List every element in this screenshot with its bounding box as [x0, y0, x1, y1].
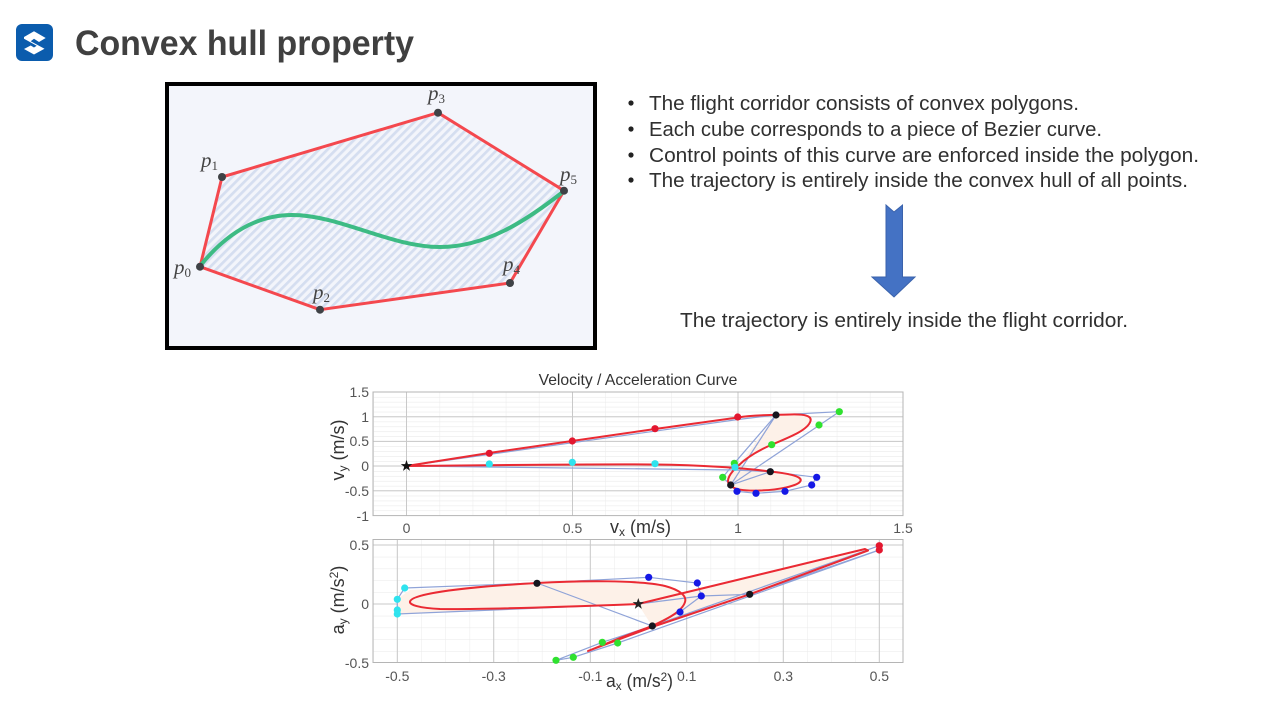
x axis label: vx: x: [619, 525, 625, 539]
x axis label: ax: (m/s: [622, 671, 661, 691]
conclusion text: The trajectory is entirely inside the flight corridor.: [680, 310, 1128, 332]
x axis label: vx: v: [610, 517, 619, 537]
y axis label: ay: (m/s: [328, 578, 348, 618]
bullet list: Each cube corresponds to a piece of Bezier curve.: [649, 119, 1102, 141]
hatched hull and red outline: [200, 113, 564, 310]
acceleration y ticks: -0.5: [345, 655, 369, 671]
point labels: p: [174, 255, 184, 279]
x axis label: ax: a: [606, 671, 616, 691]
velocity x ticks: 1: [734, 520, 742, 536]
point labels: 5: [570, 172, 577, 187]
icon: logo: [16, 24, 53, 61]
x axis label: ax: ): [667, 671, 673, 691]
acceleration plot grid: [373, 540, 903, 662]
x axis label: vx: (m/s): [625, 517, 671, 537]
acceleration x ticks: 0.1: [677, 668, 697, 684]
y axis label: vy: v: [328, 471, 348, 480]
y axis label: vy: (m/s): [328, 420, 348, 465]
title: Convex hull property: [75, 24, 415, 63]
bullet list: The flight corridor consists of convex polygons.: [649, 93, 1079, 115]
acceleration x ticks: [385, 668, 889, 684]
acceleration red curve: [410, 549, 868, 651]
point labels: p: [428, 81, 438, 105]
velocity y ticks: [345, 384, 369, 524]
velocity x ticks: 1.5: [893, 520, 913, 536]
acceleration x ticks: 0.5: [870, 668, 889, 684]
y axis label: ay: a: [328, 624, 348, 634]
velocity control polygons: [406, 412, 839, 493]
velocity y ticks: -1: [357, 508, 369, 524]
point labels: p: [201, 148, 212, 172]
acceleration start star: [633, 598, 644, 609]
control points: [196, 109, 568, 314]
point labels: 1: [212, 158, 218, 173]
y axis label: ay: y: [336, 618, 350, 624]
acceleration y ticks: 0.5: [350, 537, 369, 553]
acceleration x ticks: -0.5: [385, 668, 410, 684]
x axis label: ax: x: [616, 679, 622, 693]
acceleration x ticks: -0.1: [578, 668, 603, 684]
point labels: p: [313, 280, 324, 304]
point labels: 0: [184, 265, 191, 280]
acceleration control polygons: [397, 546, 879, 660]
bullet list: Control points of this curve are enforced inside the polygon.: [649, 145, 1199, 167]
arrow: down: [872, 205, 915, 297]
y axis label: vy: y: [336, 465, 350, 471]
point labels: 3: [438, 91, 445, 106]
x axis label: ax: 2: [661, 670, 667, 684]
acceleration hull fill: [397, 550, 868, 626]
chart title: Velocity / Acceleration Curve: [539, 372, 738, 389]
point labels: 4: [514, 262, 520, 277]
chart: acceleration curve: [327, 537, 903, 693]
acceleration x ticks: 0.3: [774, 668, 793, 684]
velocity plot grid: [373, 392, 903, 516]
velocity y ticks: 0.5: [350, 433, 369, 449]
bullet list: [628, 93, 1199, 192]
y axis label: ay: ): [328, 566, 348, 572]
velocity y ticks: -0.5: [345, 483, 369, 499]
point labels: [172, 81, 577, 305]
velocity x ticks: 0: [403, 520, 411, 536]
green Bezier curve: [200, 191, 564, 266]
velocity y ticks: 0: [361, 458, 369, 474]
point labels: p: [503, 252, 514, 276]
velocity start star: [401, 460, 412, 471]
chart: velocity curve: [328, 372, 913, 539]
y axis label: ay: 2: [327, 571, 341, 578]
velocity x ticks: [403, 520, 913, 536]
acceleration y ticks: 0: [361, 596, 369, 612]
acceleration control points: [394, 542, 883, 664]
acceleration x ticks: -0.3: [482, 668, 506, 684]
velocity y ticks: 1.5: [350, 384, 369, 400]
velocity hull fill: [728, 415, 811, 491]
point labels: p: [560, 162, 570, 186]
bullet list: The trajectory is entirely inside the convex hull of all points.: [649, 170, 1188, 192]
velocity control points: [486, 408, 843, 497]
point labels: 2: [324, 290, 330, 305]
panel: convex hull diagram: [167, 81, 595, 348]
acceleration y ticks: [345, 537, 369, 671]
velocity red curve: [406, 414, 811, 491]
velocity x ticks: 0.5: [563, 520, 582, 536]
velocity y ticks: 1: [361, 409, 369, 425]
